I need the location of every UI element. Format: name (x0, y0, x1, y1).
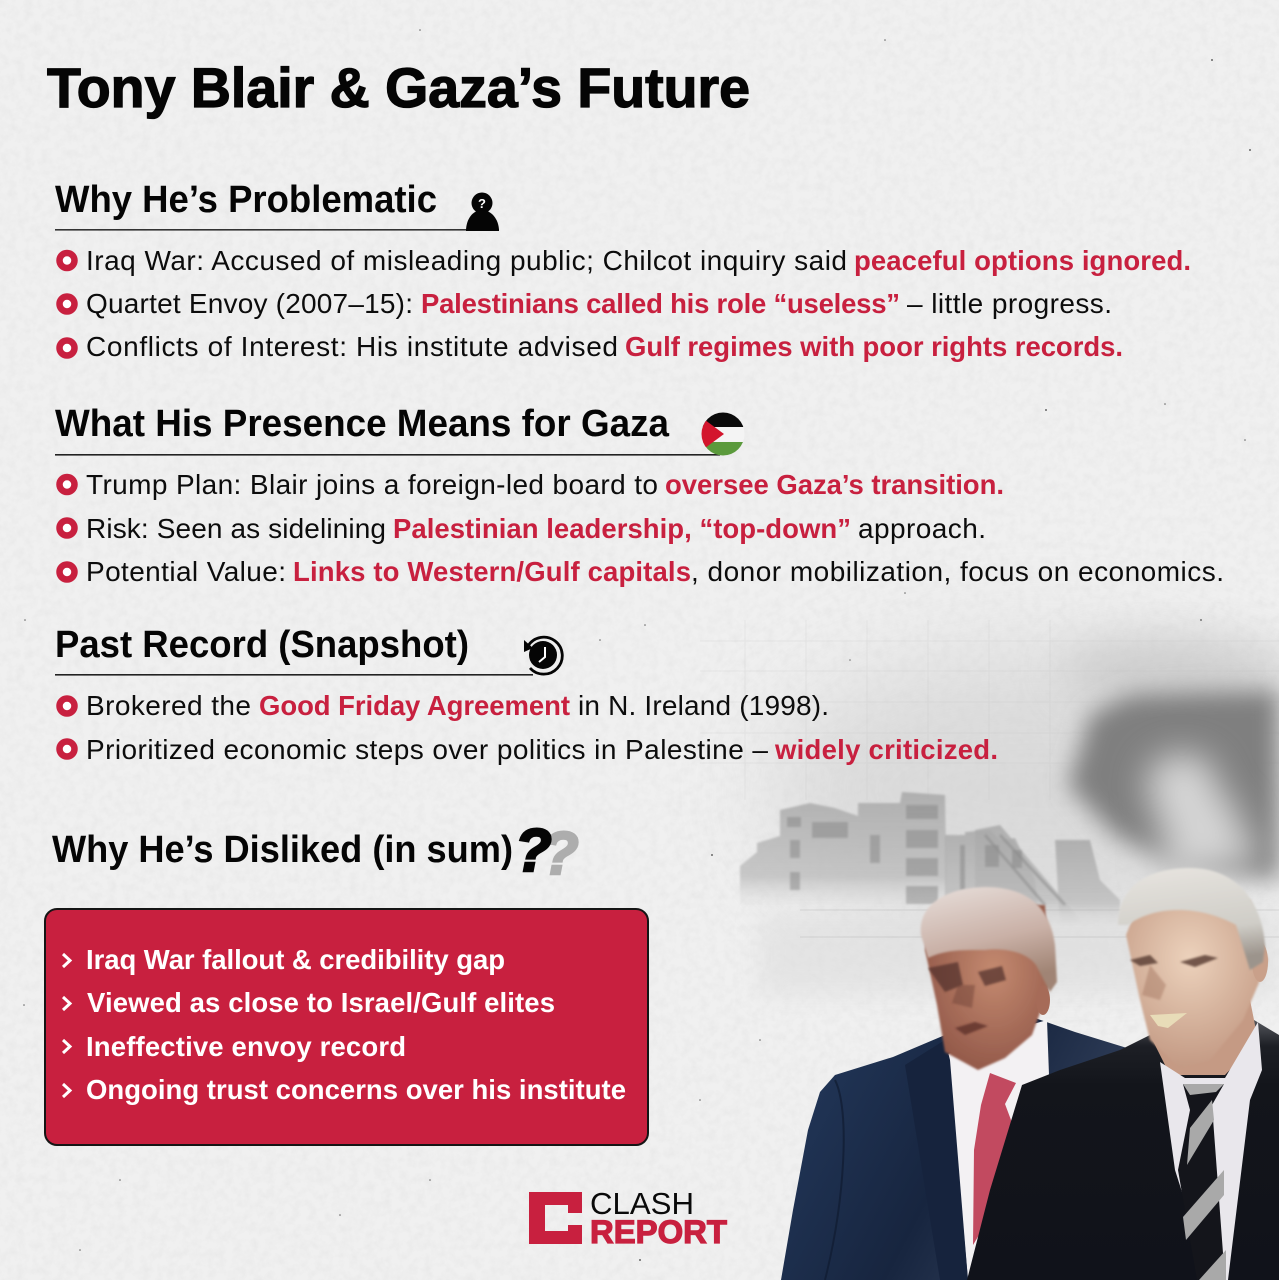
heading rule (55, 454, 720, 456)
icon: black question mark: ? (515, 817, 552, 884)
bullet row: Quartet Envoy: Palestinians called his role “useless” (421, 288, 900, 319)
bullet row: economic steps: widely criticized. (774, 734, 998, 765)
hair (1118, 868, 1265, 970)
bullet row: Trump Plan: oversee Gaza’s transition. (665, 469, 1004, 500)
icon: grey question mark: ? (542, 820, 579, 887)
jacket (967, 1020, 1279, 1280)
bullet row: Iraq War: peaceful options ignored. (854, 245, 1191, 276)
logo: Clash Report (529, 1186, 727, 1250)
bullet row: Potential Value: Links to Western/Gulf capitals (293, 556, 691, 587)
bullet row: Good Friday Agreement: Good Friday Agreement (259, 690, 570, 721)
heading: Past Record (Snapshot) (55, 624, 469, 666)
item: trust concerns: Ongoing trust concerns over his institute (86, 1074, 626, 1105)
bullet row: Risk: Risk: Seen as sidelining (86, 513, 386, 544)
photo: Blair (967, 868, 1279, 1280)
icon: person with question mark (466, 192, 499, 231)
bullet row: Good Friday Agreement: Brokered the (86, 690, 251, 721)
bullet row: Conflicts of Interest: Conflicts of Interest: His institute advised (86, 331, 618, 362)
item: close to elites: Viewed as close to Israel/Gulf elites (87, 987, 555, 1018)
bullet row: Potential Value: , donor mobilization, focus on economics. (691, 556, 1224, 587)
bullet row: Conflicts of Interest: Gulf regimes with poor rights records. (625, 331, 1123, 362)
heading: What His Presence Means for Gaza (55, 403, 670, 445)
arm crease (825, 1080, 844, 1280)
bullet row: Potential Value: Potential Value: (86, 556, 286, 587)
section: what his presence means for Gaza (55, 403, 1224, 587)
neck (1150, 1000, 1258, 1075)
bullet row: Risk: approach. (858, 513, 986, 544)
red summary panel (45, 909, 648, 1145)
tie (973, 1073, 1016, 1245)
smile (1150, 1013, 1187, 1028)
ear (1252, 942, 1268, 982)
item: Iraq War fallout: Iraq War fallout & credibility gap (86, 944, 505, 975)
bullet row: Trump Plan (60, 469, 1004, 500)
background: smoke and ruined buildings (700, 620, 1279, 995)
shirt (948, 1020, 1049, 1280)
neck and face (925, 905, 1050, 1070)
ground fade (760, 915, 1279, 995)
ruined buildings (740, 792, 1120, 925)
icon: Palestinian flag (701, 412, 745, 457)
shirt (1160, 1022, 1262, 1280)
item: ineffective envoy: Ineffective envoy record (86, 1031, 406, 1062)
bullet row: Conflicts of Interest (60, 331, 1123, 362)
dark smoke cloud (1060, 636, 1279, 880)
eyes shadow (928, 962, 1006, 992)
bullet row: economic steps: Prioritized economic steps over politics in Palestine – (86, 734, 768, 765)
face (1126, 900, 1268, 1068)
bullet row: Quartet Envoy: – little progress. (907, 288, 1112, 319)
bullet row: Potential Value (60, 556, 1224, 587)
bullet row: Good Friday Agreement: in N. Ireland (1998). (578, 690, 829, 721)
bullet row: Iraq War (60, 245, 1191, 276)
white steam (1146, 753, 1258, 876)
eyes (1130, 955, 1218, 967)
faint haze (770, 650, 1279, 930)
heading: Why He’s Disliked (in sum) (52, 829, 513, 871)
bullet row: Risk: Palestinian leadership, “top-down” (393, 513, 851, 544)
heading rule (55, 674, 533, 676)
section: why he's disliked (45, 817, 648, 1145)
photo: Trump (781, 887, 1127, 1280)
grid lines (700, 620, 1279, 800)
wordmark: CLASH (590, 1186, 694, 1221)
section: why he's problematic (55, 179, 1191, 362)
lapel (905, 1040, 968, 1280)
nose shadow (952, 985, 975, 1008)
heading rule (55, 229, 499, 231)
heading: Why He’s Problematic (55, 179, 437, 221)
bullet row: Quartet Envoy: Quartet Envoy (2007–15): (86, 288, 413, 319)
bullet row: Good Friday Agreement (60, 690, 829, 721)
ear (1036, 985, 1050, 1015)
tie (1178, 1084, 1226, 1280)
logo mark (529, 1192, 582, 1244)
icon: person with question mark: ? (478, 196, 486, 211)
hair (921, 887, 1057, 992)
suit (781, 1018, 1127, 1280)
mouth (955, 1022, 988, 1035)
title: Tony Blair & Gaza’s Future (47, 56, 750, 119)
bullet row: Iraq War: Iraq War: Accused of misleading public; Chilcot inquiry said (86, 245, 847, 276)
ground lines (800, 910, 1279, 937)
bullet row: Quartet Envoy (60, 288, 1112, 319)
bullet row: Risk (60, 513, 986, 544)
bullet row: Trump Plan: Trump Plan: Blair joins a foreign-led board to (86, 469, 658, 500)
nose shadow (1142, 965, 1166, 1000)
logo: Clash Report: REPORT (590, 1214, 727, 1250)
section: past record (55, 624, 998, 765)
icon: clock with history arrow (524, 637, 562, 674)
